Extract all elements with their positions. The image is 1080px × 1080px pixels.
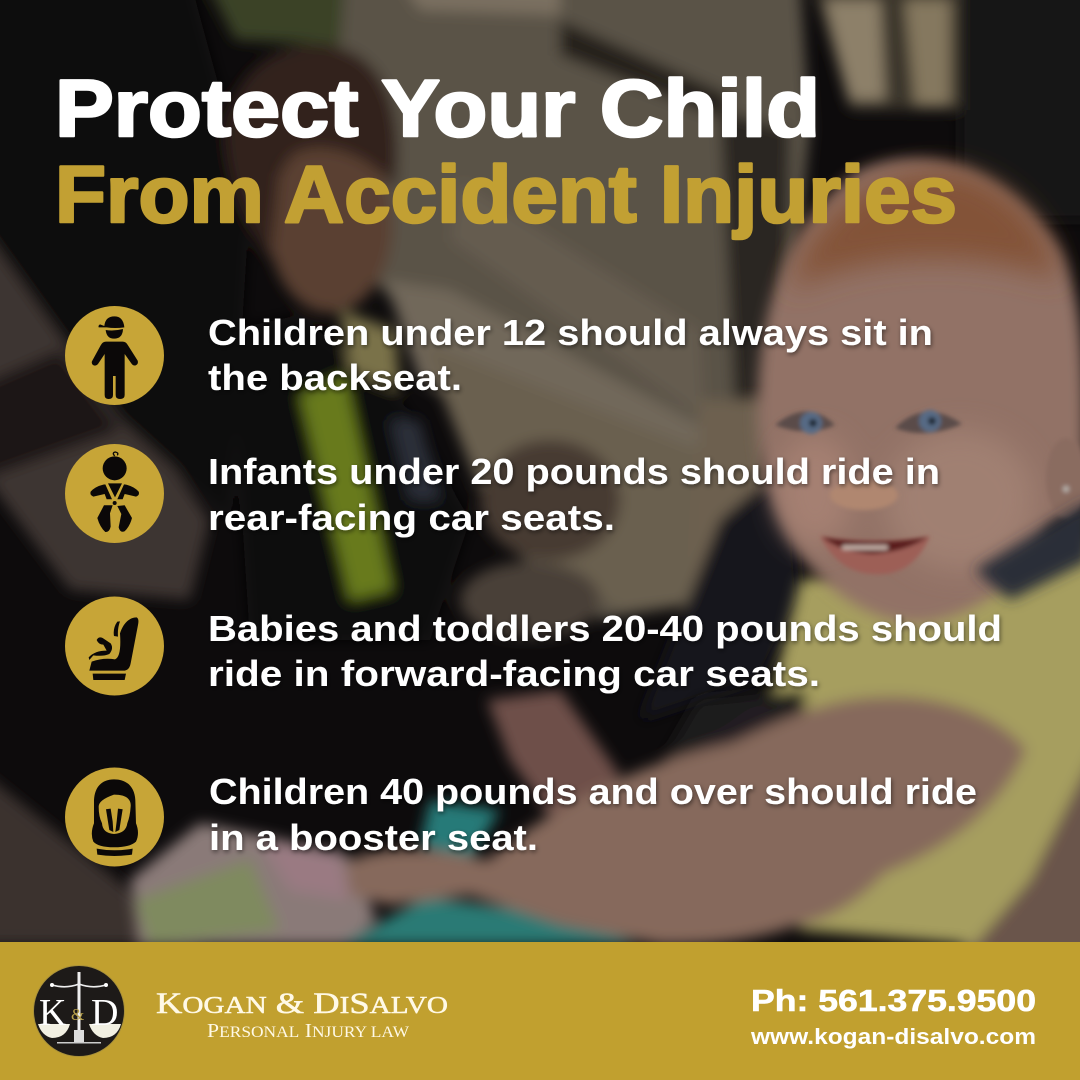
logo wordmark: KOGAN & D ISALVO (156, 987, 448, 1020)
baby head (757, 159, 1080, 623)
icon: child with cap (65, 306, 164, 405)
logo wordmark (156, 987, 448, 1042)
logo: scales badge (34, 966, 124, 1056)
eye area (775, 412, 835, 432)
logo: scales badge: & (71, 1005, 84, 1024)
text: infants under 20 pounds: rear-facing car seats. (208, 497, 615, 538)
text: infants under 20 pounds (208, 451, 940, 538)
icon: forward-facing car seat (65, 596, 164, 696)
text: children 40 pounds and over: in a booster seat. (209, 817, 538, 858)
contact website: www.kogan-disalvo.com (750, 1024, 1036, 1049)
icon: infant with harness (65, 444, 164, 543)
text: babies and toddlers (208, 608, 1002, 694)
baby ear (1048, 448, 1080, 518)
text: infants under 20 pounds: Infants under 20 pounds should ride in (208, 451, 940, 492)
text: babies and toddlers: ride in forward-facing car seats. (208, 653, 820, 694)
dark strap left of baby (646, 484, 798, 715)
left child: hair, face, clothing (268, 137, 392, 313)
text: children under 12: the backseat. (208, 357, 462, 398)
stuffed toy in the middle (480, 440, 620, 560)
text: children under 12 (208, 312, 933, 398)
text: children 40 pounds and over (209, 771, 977, 858)
car door and interior shapes (330, 0, 810, 620)
title (55, 64, 957, 240)
title: From Accident Injuries (55, 150, 957, 240)
contact phone: Ph: 561.375.9500 (751, 983, 1036, 1018)
footer band (0, 942, 1080, 1080)
title: Protect Your Child (55, 64, 820, 154)
icon: booster seat (65, 768, 164, 866)
text: children 40 pounds and over: Children 40 pounds and over should ride (209, 771, 977, 812)
text: babies and toddlers: Babies and toddlers 20-40 pounds should (208, 608, 1002, 649)
baby shirt and seat (130, 540, 1080, 960)
logo: scales badge: K (39, 992, 67, 1034)
text: children under 12: Children under 12 should always sit in (208, 312, 933, 353)
baby nose (830, 480, 898, 510)
logo wordmark: PERSONAL INJURY LAW (207, 1020, 410, 1042)
logo: scales badge: D (91, 992, 118, 1034)
